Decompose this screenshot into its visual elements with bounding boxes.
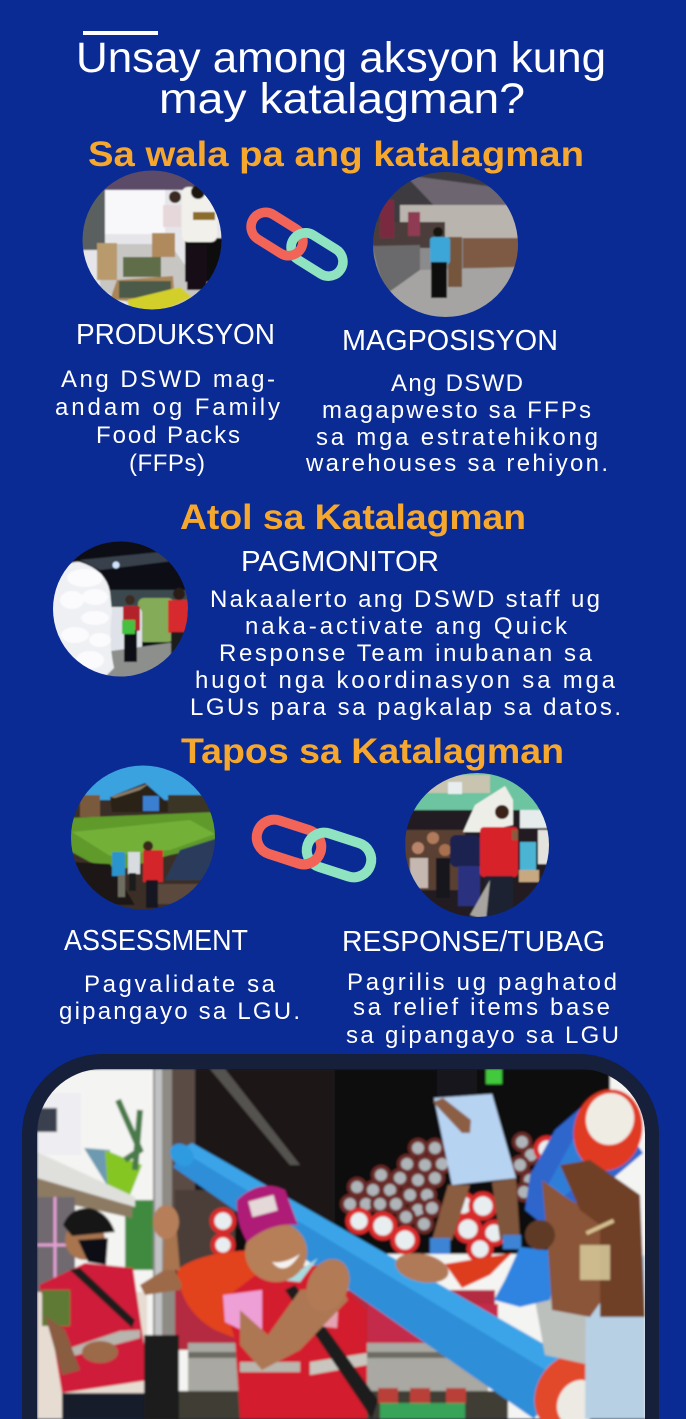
- heading: before disaster: Sa wala pa ang katalagman: [88, 135, 584, 174]
- block: MAGPOSISYON: Ang DSWD: [391, 370, 523, 397]
- block: PRODUKSYON: Ang DSWD mag-: [61, 366, 275, 393]
- block: PRODUKSYON: Food Packs: [96, 422, 240, 449]
- large blue roll: [172, 1158, 547, 1419]
- block: PAGMONITOR: PAGMONITOR: [241, 546, 439, 578]
- block: PRODUKSYON: [55, 319, 280, 477]
- photo: warehouse positioning: [370, 170, 520, 320]
- heading: after disaster: Tapos sa Katalagman: [181, 732, 564, 771]
- left man: [39, 1263, 149, 1393]
- block: PAGMONITOR: [190, 546, 621, 721]
- photo: loading tarpaulin rolls onto truck: [37, 1069, 651, 1419]
- block: RESPONSE/TUBAG: sa relief items base: [353, 994, 610, 1021]
- photo: village assessment: [68, 764, 218, 912]
- photo: relief distribution: [402, 770, 552, 921]
- right blue roll: [525, 1092, 643, 1228]
- block: RESPONSE/TUBAG: [342, 926, 619, 1049]
- block: MAGPOSISYON: warehouses sa rehiyon.: [305, 450, 608, 477]
- block: PAGMONITOR: hugot nga koordinasyon sa mga: [195, 667, 616, 694]
- photo frame: [22, 1054, 659, 1419]
- title: Unsay among aksyon kung: [76, 34, 606, 82]
- block: PAGMONITOR: naka-activate ang Quick: [245, 613, 568, 640]
- man in shorts: [437, 1069, 477, 1096]
- block: ASSESSMENT: [59, 925, 300, 1025]
- main man: [223, 1265, 367, 1419]
- block: RESPONSE/TUBAG: sa gipangayo sa LGU: [346, 1022, 619, 1049]
- block: PRODUKSYON: andam og Family: [55, 394, 280, 421]
- block: ASSESSMENT: Pagvalidate sa: [84, 971, 276, 998]
- block: MAGPOSISYON: sa mga estratehikong: [316, 424, 598, 451]
- orange tarp: [177, 1250, 262, 1340]
- icon: chain link: [252, 815, 376, 882]
- heading: during disaster: Atol sa Katalagman: [180, 498, 526, 537]
- title: may katalagman?: [159, 75, 525, 123]
- block: PRODUKSYON: (FFPs): [129, 450, 205, 477]
- block: MAGPOSISYON: magapwesto sa FFPs: [322, 397, 591, 424]
- right workers: [534, 1296, 587, 1366]
- block: ASSESSMENT: gipangayo sa LGU.: [59, 998, 300, 1025]
- icon: chain link: [246, 207, 348, 282]
- title: [76, 34, 606, 123]
- block: PAGMONITOR: Nakaalerto ang DSWD staff ug: [210, 586, 600, 613]
- block: PRODUKSYON: PRODUKSYON: [76, 319, 275, 351]
- rolls: [342, 1134, 539, 1232]
- photo: monitoring in warehouse: [50, 540, 192, 680]
- block: MAGPOSISYON: MAGPOSISYON: [342, 325, 558, 357]
- photo: food pack production: [80, 168, 225, 313]
- block: PAGMONITOR: LGUs para sa pagkalap sa datos.: [190, 694, 621, 721]
- block: MAGPOSISYON: [305, 325, 608, 477]
- decorative title bar: [83, 31, 158, 35]
- block: RESPONSE/TUBAG: RESPONSE/TUBAG: [342, 926, 605, 958]
- block: PAGMONITOR: Response Team inubanan sa: [219, 640, 593, 667]
- block: ASSESSMENT: ASSESSMENT: [64, 925, 248, 957]
- block: RESPONSE/TUBAG: Pagrilis ug paghatod: [347, 969, 617, 996]
